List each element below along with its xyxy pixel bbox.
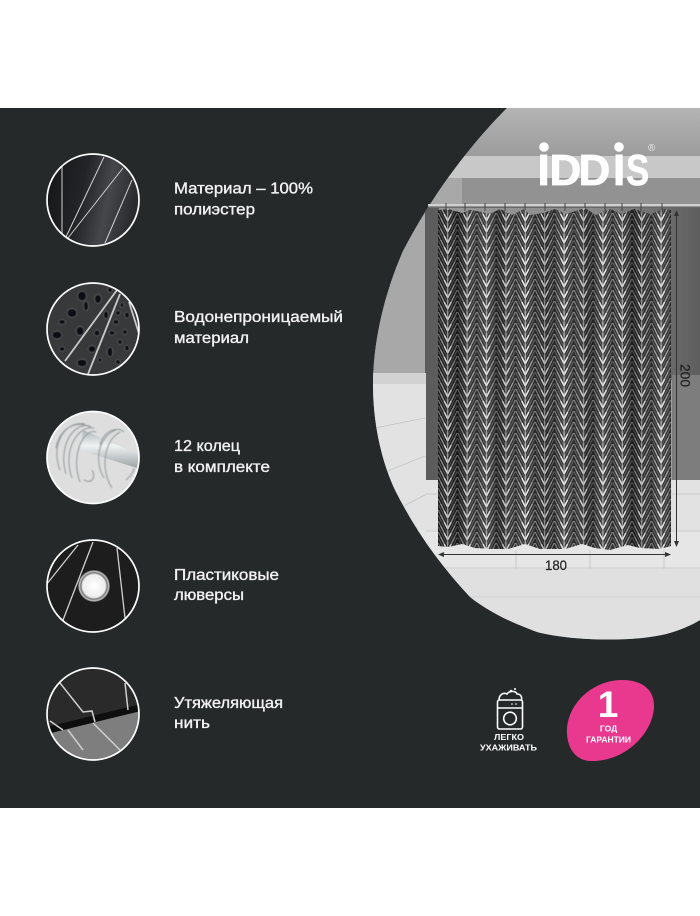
logo: iddis: ® (648, 143, 656, 154)
icon: washing machine (498, 688, 522, 729)
bathroom photo with curtain (370, 108, 700, 648)
height label: 200 (678, 364, 694, 387)
warranty badge: ГАРАНТИИ (586, 734, 631, 744)
icon: water drops (45, 281, 141, 377)
icon: fabric material (45, 152, 141, 248)
text: material: Материал – 100% (174, 180, 313, 198)
text: grommets: люверсы (174, 587, 244, 604)
text: weighted thread: нить (174, 715, 210, 732)
text: rings (174, 438, 270, 476)
dark background panel (0, 108, 700, 808)
text: rings: в комплекте (174, 459, 270, 476)
warranty badge: ГОД (600, 724, 617, 734)
width label: 180 (545, 557, 567, 573)
curtain (438, 205, 672, 551)
text: easy care: УХАЖИВАТЬ (480, 742, 537, 752)
warranty badge: 1 (598, 684, 618, 725)
logo: iddis: IDDI (538, 146, 625, 195)
text: easy care (480, 732, 537, 752)
curtain rail (428, 203, 700, 211)
warranty badge (567, 680, 654, 761)
text: material: полиэстер (174, 202, 255, 218)
text: weighted thread (174, 695, 283, 732)
icon: rings on rod (45, 410, 141, 506)
text: waterproof: Водонепроницаемый (174, 309, 343, 326)
text: material (174, 180, 313, 218)
dimension arrow: width 180 (438, 552, 671, 573)
text: easy care: ЛЕГКО (494, 732, 524, 742)
text: waterproof: материал (174, 330, 249, 347)
text: grommets: Пластиковые (174, 567, 279, 584)
text: grommets (174, 567, 279, 604)
icon: plastic grommet (45, 538, 141, 634)
icon: weighted thread (45, 666, 141, 762)
dimension arrow: height 200 (674, 210, 694, 547)
logo: iddis (538, 142, 656, 195)
text: rings: 12 колец (174, 438, 240, 455)
logo: iddis: S (626, 146, 649, 195)
text: weighted thread: Утяжеляющая (174, 695, 283, 712)
text: waterproof (174, 309, 343, 347)
